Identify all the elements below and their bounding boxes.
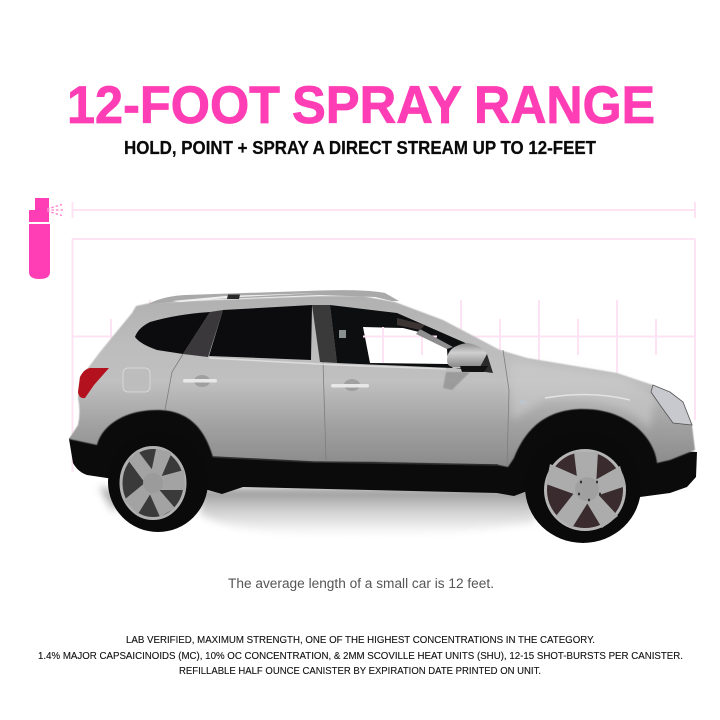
car tail light	[78, 368, 109, 398]
car ground shadow	[100, 486, 535, 536]
subtitle: HOLD, POINT + SPRAY A DIRECT STREAM UP TO 12-FEET	[124, 138, 596, 158]
rear wheel	[108, 432, 208, 532]
car side mirror	[443, 343, 493, 390]
car windows	[135, 305, 470, 368]
front wheel	[525, 431, 641, 543]
title: SPRAY	[292, 76, 462, 135]
icon: pepper spray canister	[29, 198, 63, 279]
car lower black trim and bumpers	[69, 405, 697, 497]
icon: spray mist	[47, 204, 63, 216]
product details text: REFILLABLE HALF OUNCE CANISTER BY EXPIRATION DATE PRINTED ON UNIT.	[179, 665, 541, 677]
car door seams, handles and details	[123, 350, 630, 465]
car hood highlight	[510, 360, 655, 430]
product details text: LAB VERIFIED, MAXIMUM STRENGTH, ONE OF THE HIGHEST CONCENTRATIONS IN THE CATEGORY.	[126, 634, 595, 646]
car body panels	[69, 296, 695, 467]
car	[69, 290, 697, 543]
range ruler: 12-foot spray distance line	[72, 202, 695, 218]
title: 12-FOOT	[67, 76, 280, 135]
product details text: 1.4% MAJOR CAPSAICINOIDS (MC), 10% OC CONCENTRATION, & 2MM SCOVILLE HEAT UNITS (SHU), 12-15 SHOT-BURSTS PER CANISTER.	[38, 650, 683, 662]
car roof rails	[150, 290, 399, 304]
car headlight	[651, 385, 692, 425]
caption: The average length of a small car is 12 feet.	[228, 576, 494, 591]
title	[67, 76, 655, 135]
title: RANGE	[474, 76, 655, 135]
measurement grid behind car	[72, 239, 695, 472]
product details text	[38, 634, 683, 677]
